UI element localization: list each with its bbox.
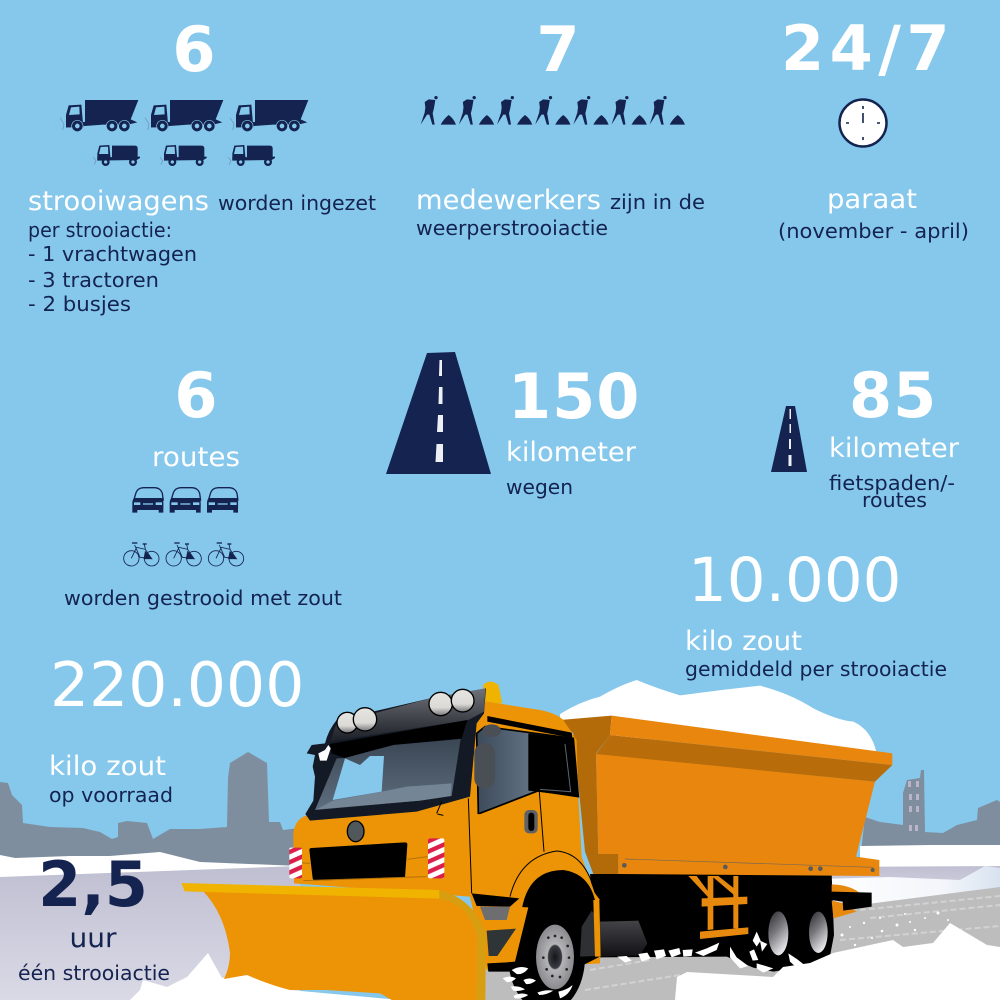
foreground snow left [130, 953, 400, 1000]
windshield [315, 739, 461, 810]
number: 220.000 [50, 649, 304, 721]
icons: cars and bikes [124, 488, 244, 566]
text block [778, 184, 969, 243]
beacon [483, 682, 502, 703]
stat: 2,5 hours [18, 848, 170, 985]
text block: (november - april) [778, 219, 969, 243]
text block: per strooiactie: [28, 218, 172, 242]
front wheel hub [536, 925, 574, 989]
bed main face [596, 753, 879, 876]
side window dark half [528, 733, 578, 797]
wheel bolts [542, 935, 570, 978]
text block: - 3 tractoren [28, 268, 159, 292]
rear wheel hubs [768, 911, 788, 955]
truck: salt bed and rear [560, 680, 892, 973]
roof lamps [337, 689, 474, 733]
bed top rim [610, 716, 892, 765]
text block [28, 186, 376, 316]
grey step [480, 907, 510, 920]
stat: 220.000 kg salt [49, 649, 304, 807]
side window [477, 727, 578, 813]
fuel tank [599, 921, 647, 957]
chassis [590, 874, 834, 972]
small white mirror mark [318, 745, 331, 761]
stat: 150 km roads [386, 352, 640, 499]
number 24/7: 24/7 [781, 12, 955, 85]
door handle [524, 810, 538, 833]
caption: worden gestrooid met zout [64, 586, 342, 610]
rear fender [832, 884, 859, 918]
bed dark band [596, 735, 892, 782]
emblem [347, 821, 364, 842]
body crease lines [293, 857, 427, 881]
stat: 85 km cycle paths [771, 359, 960, 512]
icon: clock [840, 100, 886, 146]
road [470, 887, 1000, 1000]
stat: 10.000 kg salt [685, 545, 947, 681]
bed dark front side [560, 716, 618, 874]
text block: zijn in de [610, 190, 705, 214]
grille [309, 842, 407, 881]
label fietspaden: routes [862, 488, 927, 512]
label: kilo zout [49, 751, 166, 782]
label routes: routes [152, 442, 240, 473]
front wheel snow [503, 967, 573, 999]
icon: road large [386, 352, 491, 474]
reflector right [428, 838, 444, 878]
snow plough [181, 883, 486, 1000]
frame struts [688, 876, 748, 939]
caption: gemiddeld per strooiactie [685, 657, 947, 681]
black below step [487, 962, 520, 972]
lower cab black [472, 893, 519, 907]
icons: workers [421, 96, 685, 125]
building windows [908, 781, 919, 831]
snow band right [860, 845, 1000, 870]
skyline right [860, 770, 1000, 860]
truck: cab [289, 682, 601, 1000]
snow chunks at rear tyres [617, 932, 807, 973]
text block: weerperstrooiactie [416, 216, 608, 240]
orange step [484, 907, 528, 964]
label fietspaden [829, 471, 955, 512]
front tyre [508, 902, 585, 1000]
text block [416, 185, 705, 240]
stat: 24/7 [778, 12, 969, 243]
number 150: 150 [508, 360, 640, 433]
windshield lower reflection [317, 783, 452, 809]
label wegen: wegen [506, 475, 573, 499]
text block: strooiwagens [28, 186, 209, 217]
label kilometer: kilometer [506, 437, 637, 468]
step recess [487, 929, 516, 956]
reflector left [289, 848, 302, 878]
road markings [585, 896, 1000, 990]
icons: trucks [60, 100, 308, 166]
text block: - 2 busjes [28, 292, 131, 316]
label: kilo zout [685, 626, 802, 657]
plough blade [202, 890, 485, 1000]
windshield sky reflection [333, 756, 384, 800]
salt specks [840, 912, 949, 946]
side mirrors [474, 724, 501, 789]
bed rail and bolts [622, 859, 875, 872]
stat: employees [416, 13, 705, 240]
caption: op voorraad [49, 783, 173, 807]
stat: gritting vehicles [28, 13, 376, 316]
dark cab frame [305, 688, 486, 821]
number: 10.000 [688, 545, 901, 616]
cab body [293, 702, 600, 970]
label: uur [70, 923, 117, 954]
number 6: 6 [172, 13, 216, 86]
label kilometer: kilometer [829, 433, 960, 464]
icon: road small [771, 406, 807, 472]
text block: paraat [827, 184, 917, 215]
number 85: 85 [849, 359, 937, 432]
roof visor [330, 688, 485, 742]
snowy road left [0, 866, 300, 1000]
wheel arch [520, 870, 600, 970]
plough right edge [439, 890, 486, 1000]
stat: routes [64, 359, 342, 610]
text block: worden ingezet [218, 191, 376, 215]
snow on salt bed [560, 680, 877, 753]
plough yellow top strip [181, 883, 439, 899]
caption: één strooiactie [18, 961, 170, 985]
number 7: 7 [536, 13, 580, 86]
black sun band [330, 720, 467, 758]
number: 2,5 [38, 848, 148, 921]
snow band left [0, 852, 300, 900]
foreground snow right [675, 923, 1000, 1000]
text block: - 1 vrachtwagen [28, 242, 197, 266]
text block: medewerkers [416, 185, 601, 216]
top door stripe [487, 716, 572, 738]
label fietspaden: fietspaden/- [829, 471, 955, 495]
number 6: 6 [174, 359, 218, 432]
skyline left [0, 752, 300, 880]
door and fender lines [437, 792, 595, 897]
